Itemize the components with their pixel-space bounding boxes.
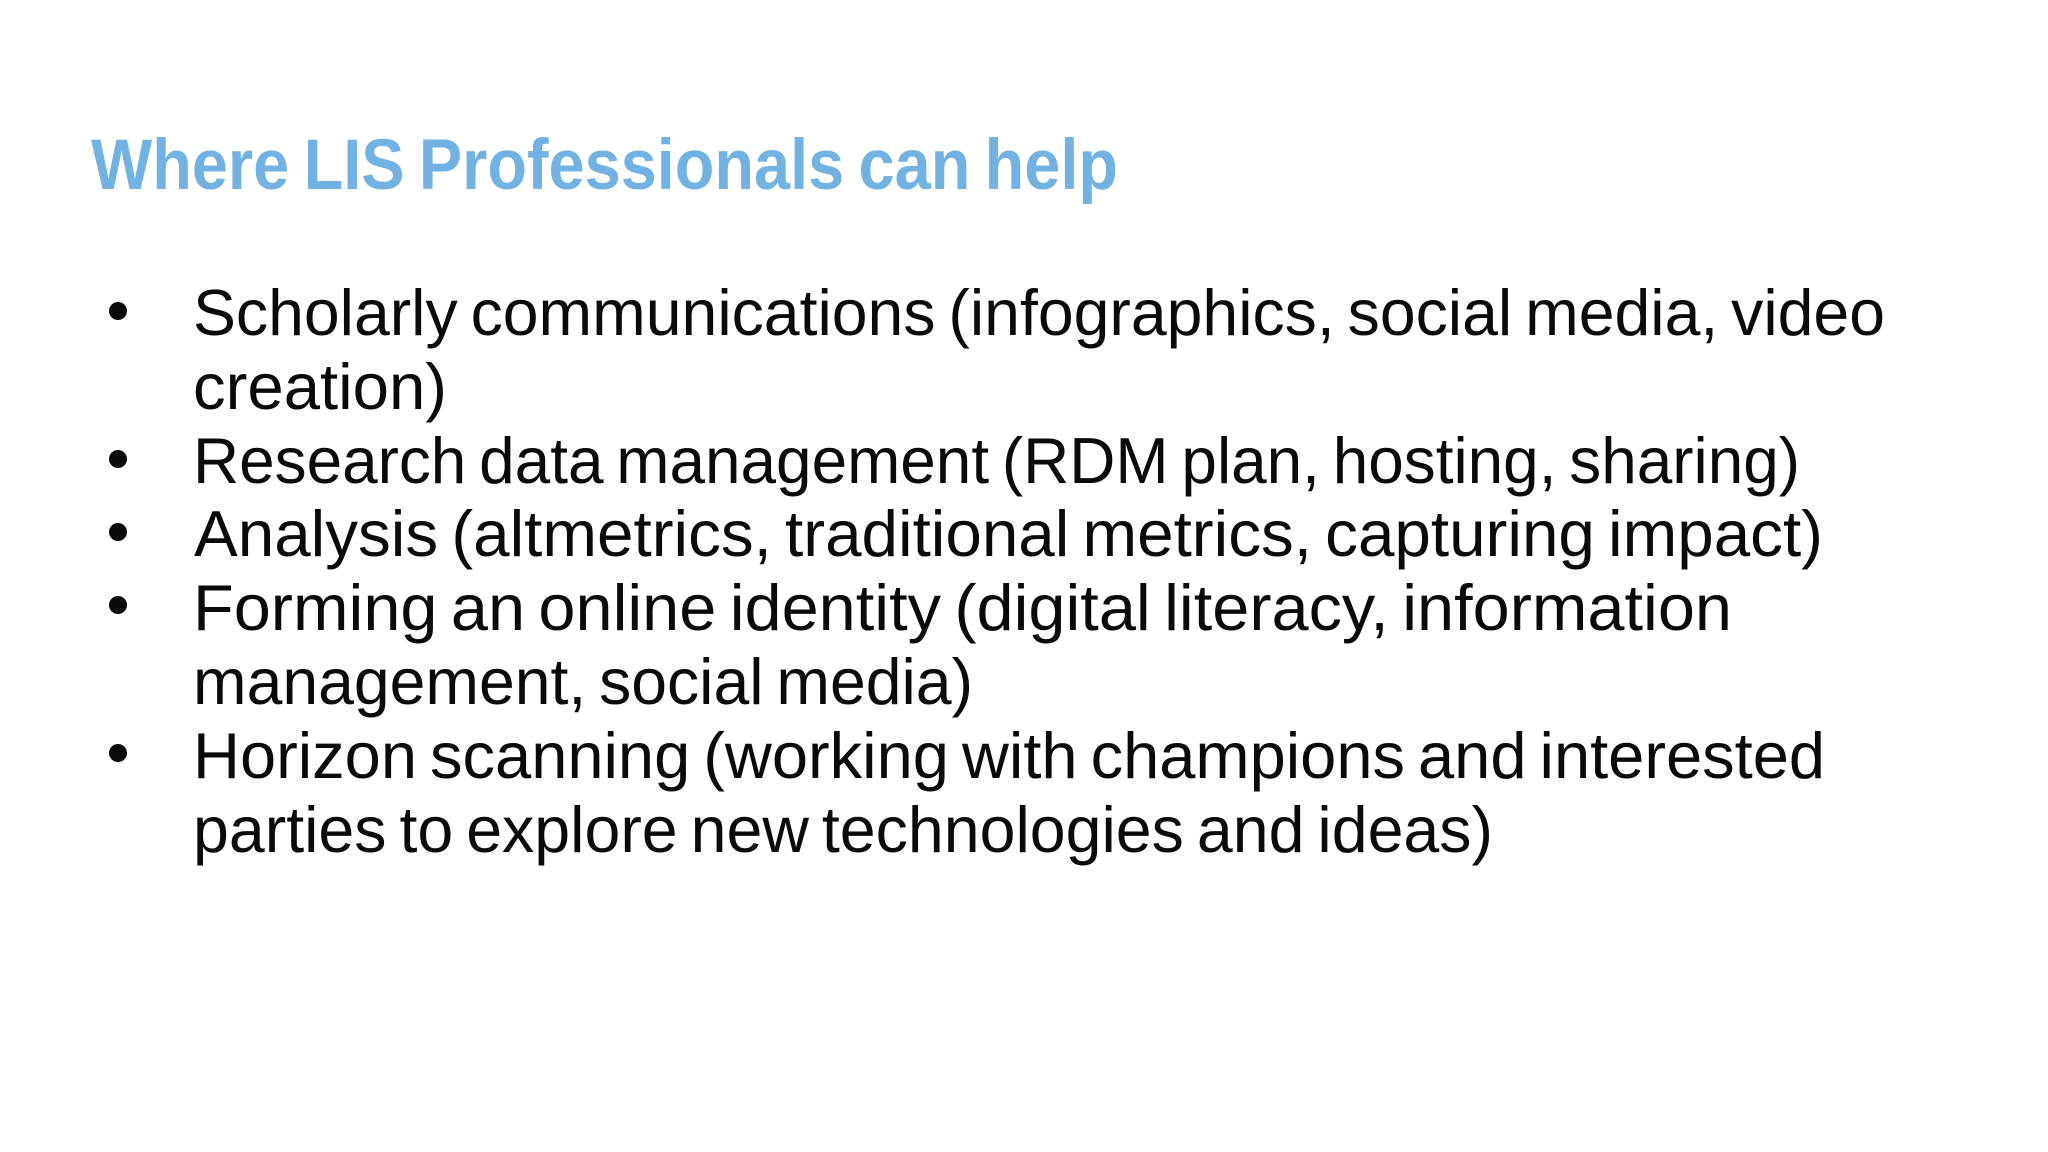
bullet item: analysis: Analysis (altmetrics, traditional metrics, capturing impact) [194, 497, 1823, 570]
bullet item: scholarly communications: Scholarly communications (infographics, social media, video [193, 276, 1885, 349]
bullet item: horizon scanning [109, 719, 1825, 866]
bullet item: forming an online identity: management, social media) [193, 645, 973, 718]
bullet item: scholarly communications [109, 276, 1885, 423]
bullet item: horizon scanning: parties to explore new technologies and ideas) [193, 793, 1493, 866]
bullet item: forming an online identity: Forming an online identity (digital literacy, information [193, 571, 1732, 644]
bullet item: horizon scanning: Horizon scanning (working with champions and interested [193, 719, 1825, 792]
bullet item: forming an online identity [109, 571, 1732, 718]
bullet item: research data management: Research data management (RDM plan, hosting, sharing) [193, 424, 1800, 497]
bullet list [109, 276, 1885, 866]
title: Where LIS Professionals can help [91, 126, 1118, 205]
bullet item: scholarly communications: creation) [193, 350, 447, 423]
